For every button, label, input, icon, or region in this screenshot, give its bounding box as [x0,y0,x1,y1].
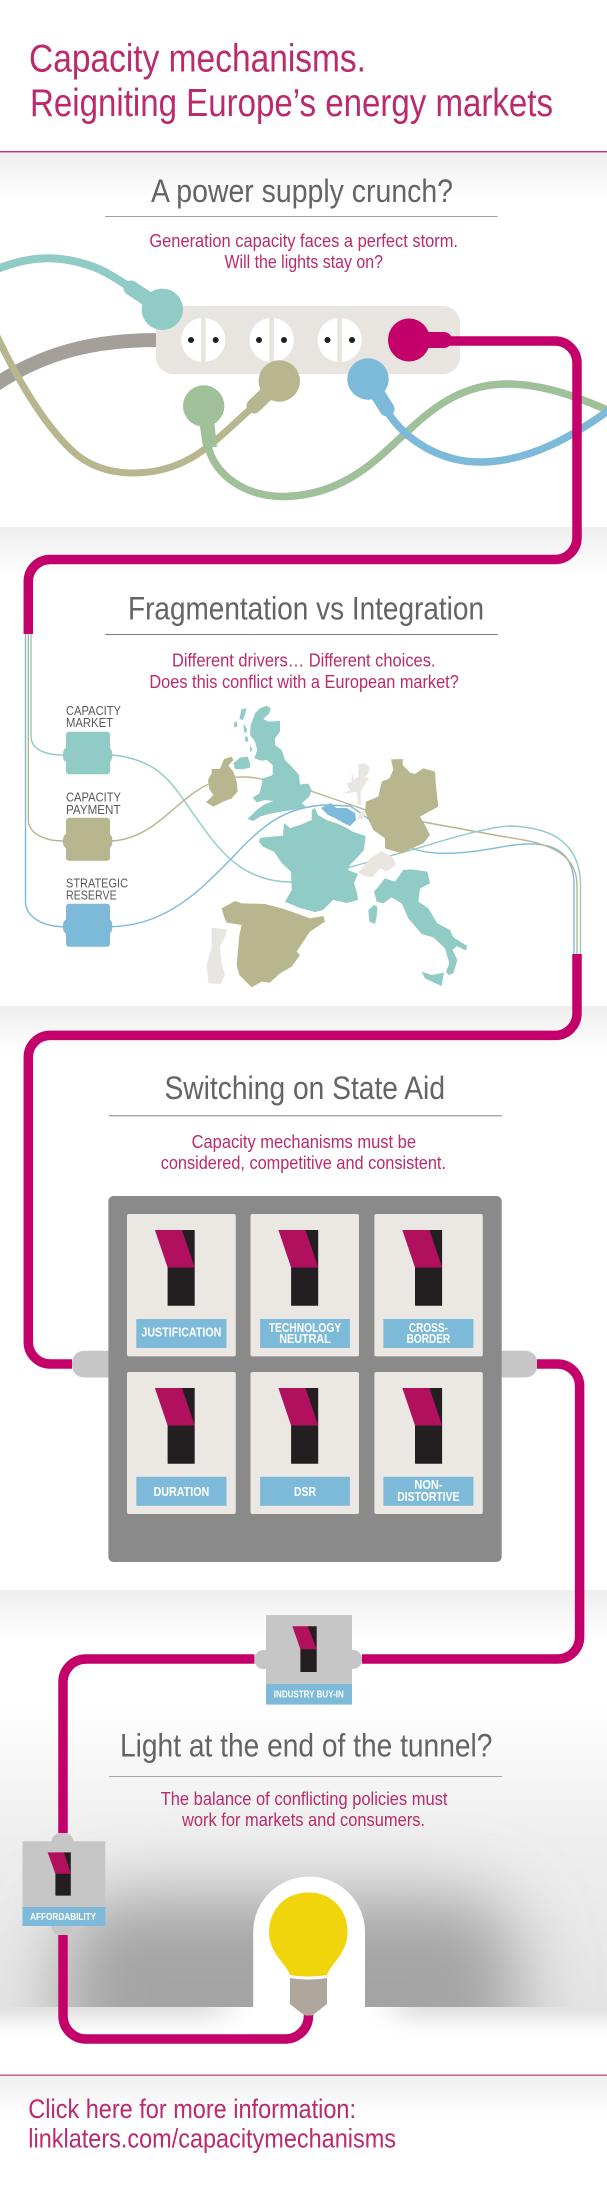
text: section 1 intro: Will the lights stay on? [224,252,383,272]
icon: light bulb [269,1892,348,2016]
thin coloured lines linking legend and map [26,634,580,956]
switch card: justification: JUSTIFICATION [141,1324,221,1339]
header: title [29,38,553,125]
header: title: Capacity mechanisms. [29,38,366,80]
text: section 3 intro: considered, competitive and consistent. [161,1153,446,1173]
switch: affordability: AFFORDABILITY [30,1912,96,1923]
switch: industry buy-in [254,1615,362,1705]
heading: light at the end of the tunnel: Light at the end of the tunnel? [120,1728,492,1764]
legend: strategic reserve: RESERVE [66,889,117,903]
switch card: cross-border [374,1214,483,1356]
illustration: power strip with plugs [0,258,607,497]
switch: industry buy-in: INDUSTRY BUY-IN [274,1690,344,1700]
power strip [156,306,460,374]
switch card: cross-border: BORDER [407,1331,451,1346]
text: section 4 intro [161,1789,447,1830]
connector lugs of switch panel [72,1351,537,1378]
footer link text: Click here for more information: [28,2094,356,2124]
switch card: DSR: DSR [294,1484,316,1499]
text: section 4 intro: work for markets and consumers. [181,1810,425,1830]
heading: switching on state aid: Switching on State Aid [164,1070,445,1106]
plug: magenta [388,318,444,362]
plug: teal [0,258,183,330]
map: Ireland [206,757,238,807]
map: Italy [368,869,467,986]
map: Belgium [321,803,356,826]
heading: a power supply crunch: A power supply crunch? [151,173,453,209]
text: section 2 intro: Does this conflict with a European market? [149,672,459,692]
legend: strategic reserve: STRATEGIC [66,877,128,891]
text: section 1 intro: Generation capacity faces a perfect storm. [149,231,458,251]
panel: switchboard [108,1196,502,1562]
footer link text: linklaters.com/capacitymechanisms [28,2124,396,2154]
switch card: technology neutral [250,1214,359,1356]
legend: capacity market: CAPACITY [66,704,122,718]
cable: olive [0,332,254,473]
legend: strategic reserve [63,877,128,947]
legend: capacity market [63,704,122,774]
switch card: cross-border: CROSS- [409,1320,448,1335]
legend: capacity payment [63,791,122,861]
legend: capacity market: MARKET [66,716,113,730]
switch card: non-distortive: DISTORTIVE [397,1489,460,1504]
tunnel opening [253,1876,365,2030]
map of western Europe [206,706,467,987]
footer rule [0,2074,607,2076]
switch card: duration [127,1372,236,1514]
switch card: duration: DURATION [154,1484,209,1499]
switch card: technology neutral: NEUTRAL [279,1331,331,1346]
heading: fragmentation vs integration: Fragmentation vs Integration [128,590,484,626]
wire: magenta circuit [28,341,580,2039]
text: section 1 intro [149,231,458,272]
map: Spain [222,901,325,987]
map: Netherlands [343,763,369,805]
map: Luxembourg [357,811,365,819]
text: section 2 intro: Different drivers… Different choices. [172,651,436,671]
switch: affordability [22,1833,105,1935]
legend: capacity payment: CAPACITY [66,791,122,805]
plug: olive [254,360,300,406]
map: France [259,808,366,912]
plug: blue [347,358,607,462]
legend: capacity payment: PAYMENT [66,803,121,817]
map: United Kingdom [233,706,312,821]
plug: green [183,384,607,497]
map: Portugal [207,928,227,984]
switch card: justification [127,1214,236,1356]
cable: grey mains lead [0,340,158,385]
switch card: non-distortive: NON- [414,1477,442,1492]
map: Germany [365,759,438,853]
text: section 4 intro: The balance of conflicting policies must [161,1789,447,1809]
switch card: non-distortive [374,1372,483,1514]
switch card: DSR [250,1372,359,1514]
footer link text [28,2094,396,2154]
switch card: technology neutral: TECHNOLOGY [269,1320,342,1335]
text: section 2 intro [149,651,459,692]
text: section 3 intro: Capacity mechanisms must be [192,1132,416,1152]
map: Switzerland [358,851,396,877]
text: section 3 intro [161,1132,446,1173]
